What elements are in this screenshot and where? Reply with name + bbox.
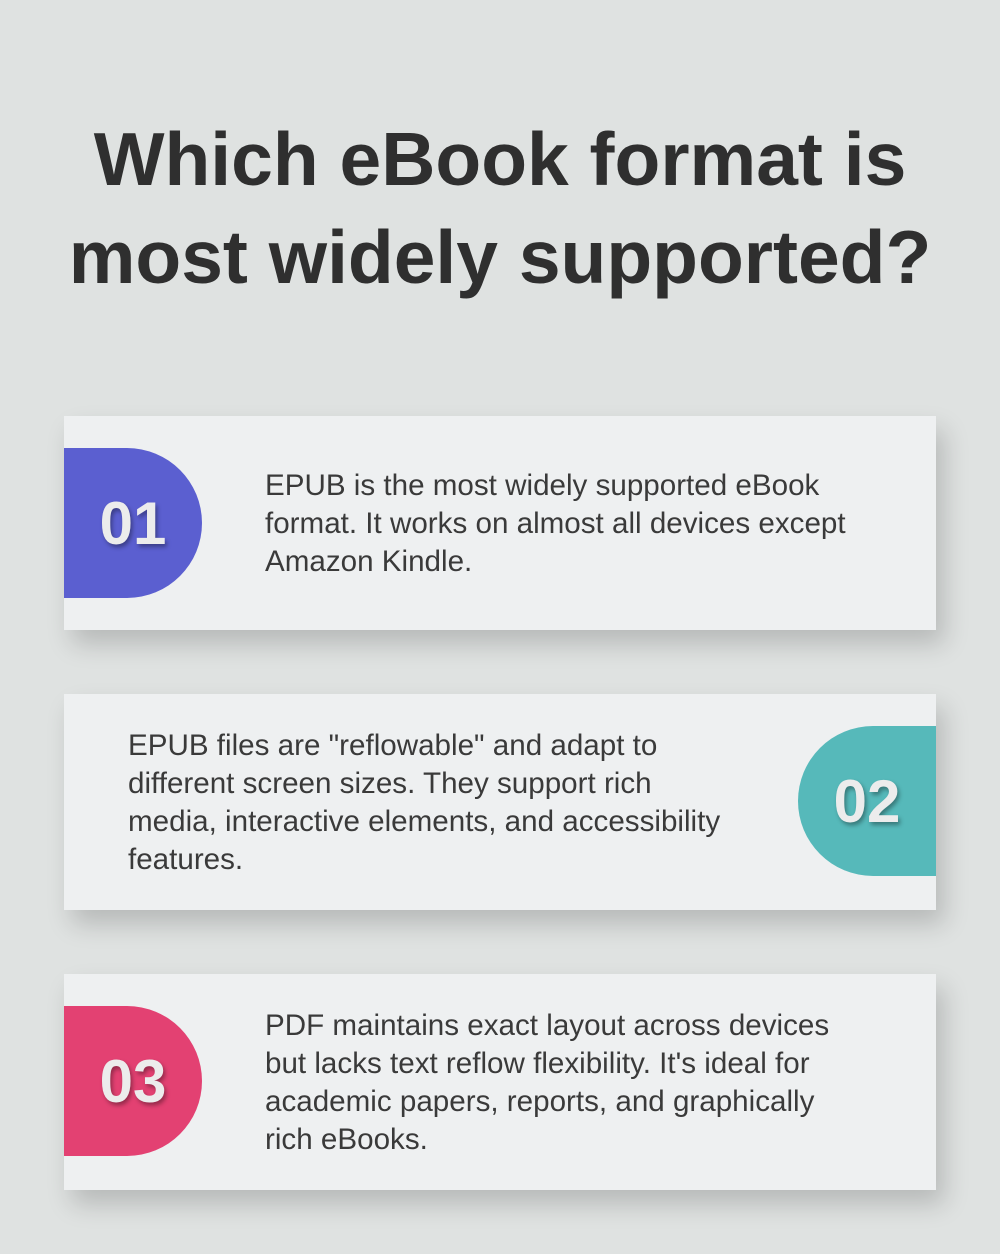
panel: card 3 bbox=[64, 974, 936, 1190]
badge: 02 bbox=[798, 726, 936, 876]
badge: 01 bbox=[64, 448, 202, 598]
text: card 1: Amazon Kindle. bbox=[265, 545, 472, 578]
text: card 2: features. bbox=[128, 843, 243, 876]
text: card 3: rich eBooks. bbox=[265, 1123, 428, 1156]
panel: card 2 bbox=[64, 694, 936, 910]
text: card 1 bbox=[265, 469, 846, 578]
text: card 1: format. It works on almost all devices except bbox=[265, 507, 846, 540]
title: Which eBook format is bbox=[94, 117, 906, 201]
text: card 2: different screen sizes. They support rich bbox=[128, 767, 652, 800]
text: card 2 bbox=[128, 729, 720, 876]
badge: 03 bbox=[64, 1006, 202, 1156]
text: card 3: academic papers, reports, and graphically bbox=[265, 1085, 814, 1118]
text: card 2: EPUB files are "reflowable" and adapt to bbox=[128, 729, 657, 762]
panel: card 1 bbox=[64, 416, 936, 630]
badge: 03: 03 bbox=[100, 1048, 166, 1114]
title: most widely supported? bbox=[69, 215, 931, 299]
text: card 3: PDF maintains exact layout across devices bbox=[265, 1009, 829, 1042]
badge: 02: 02 bbox=[834, 768, 900, 834]
text: card 1: EPUB is the most widely supported eBook bbox=[265, 469, 819, 502]
text: card 3 bbox=[265, 1009, 829, 1156]
text: card 3: but lacks text reflow flexibility. It's ideal for bbox=[265, 1047, 810, 1080]
badge: 01: 01 bbox=[100, 490, 166, 556]
text: card 2: media, interactive elements, and accessibility bbox=[128, 805, 720, 838]
title bbox=[69, 117, 931, 299]
